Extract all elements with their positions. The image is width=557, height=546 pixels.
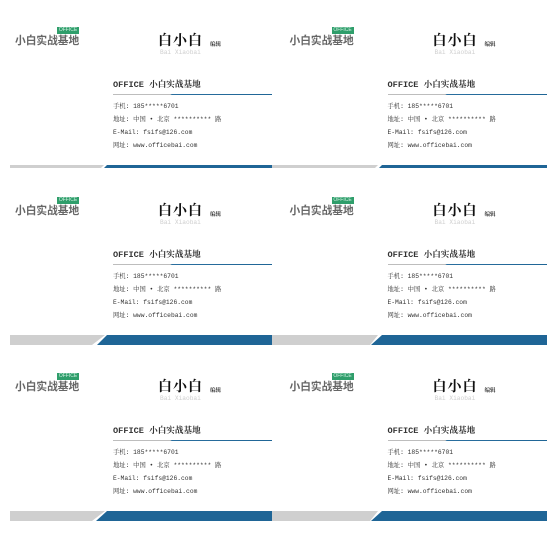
company heading: OFFICE 小白实战基地 <box>388 426 475 436</box>
address: 地址: 中国 • 北京 ********** 路 <box>388 286 496 293</box>
job title: 编辑 <box>484 386 496 394</box>
heading rule <box>388 264 546 265</box>
company heading: OFFICE 小白实战基地 <box>388 80 475 90</box>
job title: 编辑 <box>484 40 496 48</box>
website: 网址: www.officebai.com <box>113 488 197 495</box>
pinyin name: Bai Xiaobai <box>434 49 475 56</box>
website: 网址: www.officebai.com <box>113 142 197 149</box>
logo: 小白实战基地 <box>15 205 79 217</box>
address: 地址: 中国 • 北京 ********** 路 <box>113 116 221 123</box>
pinyin name: Bai Xiaobai <box>434 395 475 402</box>
logo badge: OFFICE <box>59 373 77 379</box>
website: 网址: www.officebai.com <box>388 312 472 319</box>
pinyin name: Bai Xiaobai <box>160 49 201 56</box>
address: 地址: 中国 • 北京 ********** 路 <box>113 286 221 293</box>
name: 白小白 <box>158 200 203 220</box>
phone: 手机: 185*****6701 <box>113 449 178 456</box>
name: 白小白 <box>432 200 478 220</box>
email: E-Mail: fsifs@126.com <box>113 475 192 482</box>
phone: 手机: 185*****6701 <box>388 273 453 280</box>
card 1 <box>15 27 272 149</box>
job title: 编辑 <box>484 210 496 218</box>
company heading: OFFICE 小白实战基地 <box>388 250 475 260</box>
name: 白小白 <box>158 376 203 396</box>
company heading: OFFICE 小白实战基地 <box>113 426 201 436</box>
address: 地址: 中国 • 北京 ********** 路 <box>388 116 496 123</box>
address: 地址: 中国 • 北京 ********** 路 <box>388 462 496 469</box>
logo: 小白实战基地 <box>15 381 79 393</box>
phone: 手机: 185*****6701 <box>388 103 453 110</box>
job title: 编辑 <box>210 210 221 218</box>
address: 地址: 中国 • 北京 ********** 路 <box>113 462 221 469</box>
phone: 手机: 185*****6701 <box>113 273 178 280</box>
logo badge: OFFICE <box>333 373 352 379</box>
card 4 <box>290 197 547 319</box>
logo: 小白实战基地 <box>290 35 354 47</box>
logo: 小白实战基地 <box>15 35 79 47</box>
company heading: OFFICE 小白实战基地 <box>113 250 201 260</box>
card 3 <box>15 197 272 319</box>
company heading: OFFICE 小白实战基地 <box>113 80 201 90</box>
email: E-Mail: fsifs@126.com <box>388 475 467 482</box>
website: 网址: www.officebai.com <box>388 488 472 495</box>
logo badge: OFFICE <box>333 27 352 33</box>
email: E-Mail: fsifs@126.com <box>113 129 192 136</box>
logo: 小白实战基地 <box>290 205 354 217</box>
name: 白小白 <box>432 376 478 396</box>
phone: 手机: 185*****6701 <box>113 103 178 110</box>
heading rule <box>388 440 546 441</box>
email: E-Mail: fsifs@126.com <box>388 129 467 136</box>
pinyin name: Bai Xiaobai <box>160 395 201 402</box>
pinyin name: Bai Xiaobai <box>434 219 475 226</box>
logo badge: OFFICE <box>333 197 352 203</box>
email: E-Mail: fsifs@126.com <box>113 299 192 306</box>
card 2 <box>290 27 547 149</box>
card 6 <box>290 373 547 495</box>
heading rule <box>113 94 272 95</box>
pinyin name: Bai Xiaobai <box>160 219 201 226</box>
job title: 编辑 <box>210 40 221 48</box>
logo badge: OFFICE <box>59 27 77 33</box>
heading rule <box>113 264 272 265</box>
name: 白小白 <box>432 30 478 50</box>
heading rule <box>388 94 546 95</box>
job title: 编辑 <box>210 386 221 394</box>
logo: 小白实战基地 <box>290 381 354 393</box>
heading rule <box>113 440 272 441</box>
phone: 手机: 185*****6701 <box>388 449 453 456</box>
website: 网址: www.officebai.com <box>388 142 472 149</box>
logo badge: OFFICE <box>59 197 77 203</box>
email: E-Mail: fsifs@126.com <box>388 299 467 306</box>
card 5 <box>15 373 272 495</box>
name: 白小白 <box>158 30 203 50</box>
website: 网址: www.officebai.com <box>113 312 197 319</box>
